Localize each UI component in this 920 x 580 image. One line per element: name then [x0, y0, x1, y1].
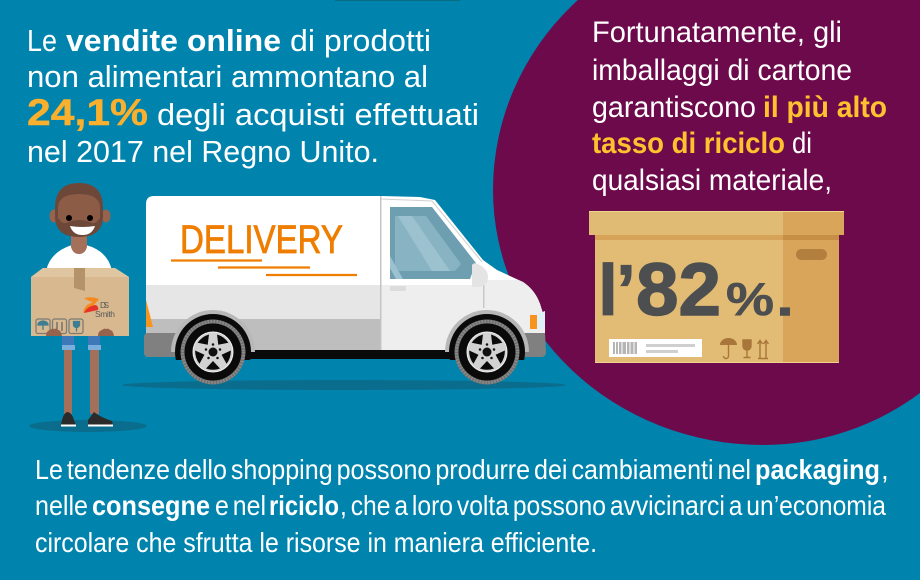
- side mirror: [472, 263, 488, 287]
- speed lines: [171, 260, 357, 275]
- shirt: [46, 245, 112, 271]
- box handle: [796, 249, 827, 260]
- text block: shopping trends conclusion: e nel: [215, 490, 266, 521]
- percentage: l'82%.: 82: [636, 248, 721, 331]
- illustration: delivery man holding parcel: [29, 183, 147, 432]
- smile: [70, 226, 95, 235]
- text block: shopping trends conclusion: packaging: [755, 454, 880, 485]
- text block: cardboard recycling rate: [592, 16, 887, 197]
- rear wheel: [171, 310, 255, 384]
- text block: shopping trends conclusion: Le tendenze dello shopping possono produrre dei cambiamenti nel: [35, 454, 751, 485]
- text block: cardboard recycling rate: di: [792, 127, 812, 160]
- parcel: [31, 268, 129, 336]
- headlight: [530, 311, 545, 329]
- text block: cardboard recycling rate: il più alto: [763, 91, 887, 124]
- heading: online sales statistic: non alimentari ammontano al: [27, 59, 428, 94]
- text block: shopping trends conclusion: nelle: [35, 490, 88, 521]
- door handle: [390, 286, 406, 291]
- heading: online sales statistic: 24,1%: [27, 92, 148, 133]
- DELIVERY lettering: DELIVERY: [180, 218, 343, 262]
- bumpers and underbody: [178, 350, 468, 359]
- illustration: cardboard box with 82%: [589, 211, 844, 363]
- parcel handling icons: [36, 319, 83, 334]
- percentage: l'82%.: l: [598, 251, 618, 331]
- text block: cardboard recycling rate: imballaggi di cartone: [592, 54, 852, 87]
- text block: shopping trends conclusion: riciclo: [269, 490, 339, 521]
- legs: [64, 348, 99, 414]
- percentage: l'82%.: ’: [616, 251, 636, 331]
- text block: shopping trends conclusion: ,: [881, 454, 889, 485]
- panel: purple circle background: [493, 0, 920, 445]
- heading: online sales statistic: vendite online: [66, 23, 281, 58]
- rear tail light: [146, 300, 153, 327]
- barcode label: [609, 339, 702, 357]
- percentage: l'82%.: [598, 248, 793, 331]
- heading: online sales statistic: Le: [27, 23, 57, 58]
- text block: cardboard recycling rate: tasso di riciclo: [592, 127, 785, 160]
- shorts: [62, 334, 100, 346]
- heading: online sales statistic: [27, 23, 479, 169]
- tape: [74, 268, 85, 291]
- head: [55, 183, 103, 237]
- text block: cardboard recycling rate: qualsiasi materiale,: [592, 164, 832, 197]
- DS Smith logo: Smith: [95, 309, 115, 319]
- heading: online sales statistic: di prodotti: [290, 23, 431, 58]
- DS Smith logo: [83, 297, 115, 319]
- van window: [390, 207, 476, 279]
- front wheel: [445, 310, 529, 384]
- hands: [46, 329, 62, 336]
- shadow under van: [122, 380, 566, 390]
- illustration: delivery van: [144, 196, 546, 384]
- ground shadow: [29, 420, 147, 432]
- heading: online sales statistic: degli acquisti effettuati: [157, 97, 479, 132]
- text block: cardboard recycling rate: Fortunatamente, gli: [592, 16, 842, 49]
- ears: [50, 210, 58, 222]
- text block: shopping trends conclusion: consegne: [92, 490, 210, 521]
- text block: shopping trends conclusion: [35, 454, 889, 558]
- eyes: [66, 215, 72, 221]
- heading: online sales statistic: nel 2017 nel Regno Unito.: [27, 134, 379, 169]
- neck: [71, 235, 87, 254]
- percentage: l'82%.: .: [777, 273, 793, 325]
- text block: cardboard recycling rate: garantiscono: [592, 91, 756, 124]
- handling icons: [720, 338, 768, 359]
- text block: shopping trends conclusion: circolare che sfrutta le risorse in maniera efficiente.: [35, 527, 597, 558]
- shoes: [61, 412, 113, 425]
- percentage: l'82%.: %: [726, 273, 774, 325]
- DS Smith logo: DS: [100, 300, 109, 310]
